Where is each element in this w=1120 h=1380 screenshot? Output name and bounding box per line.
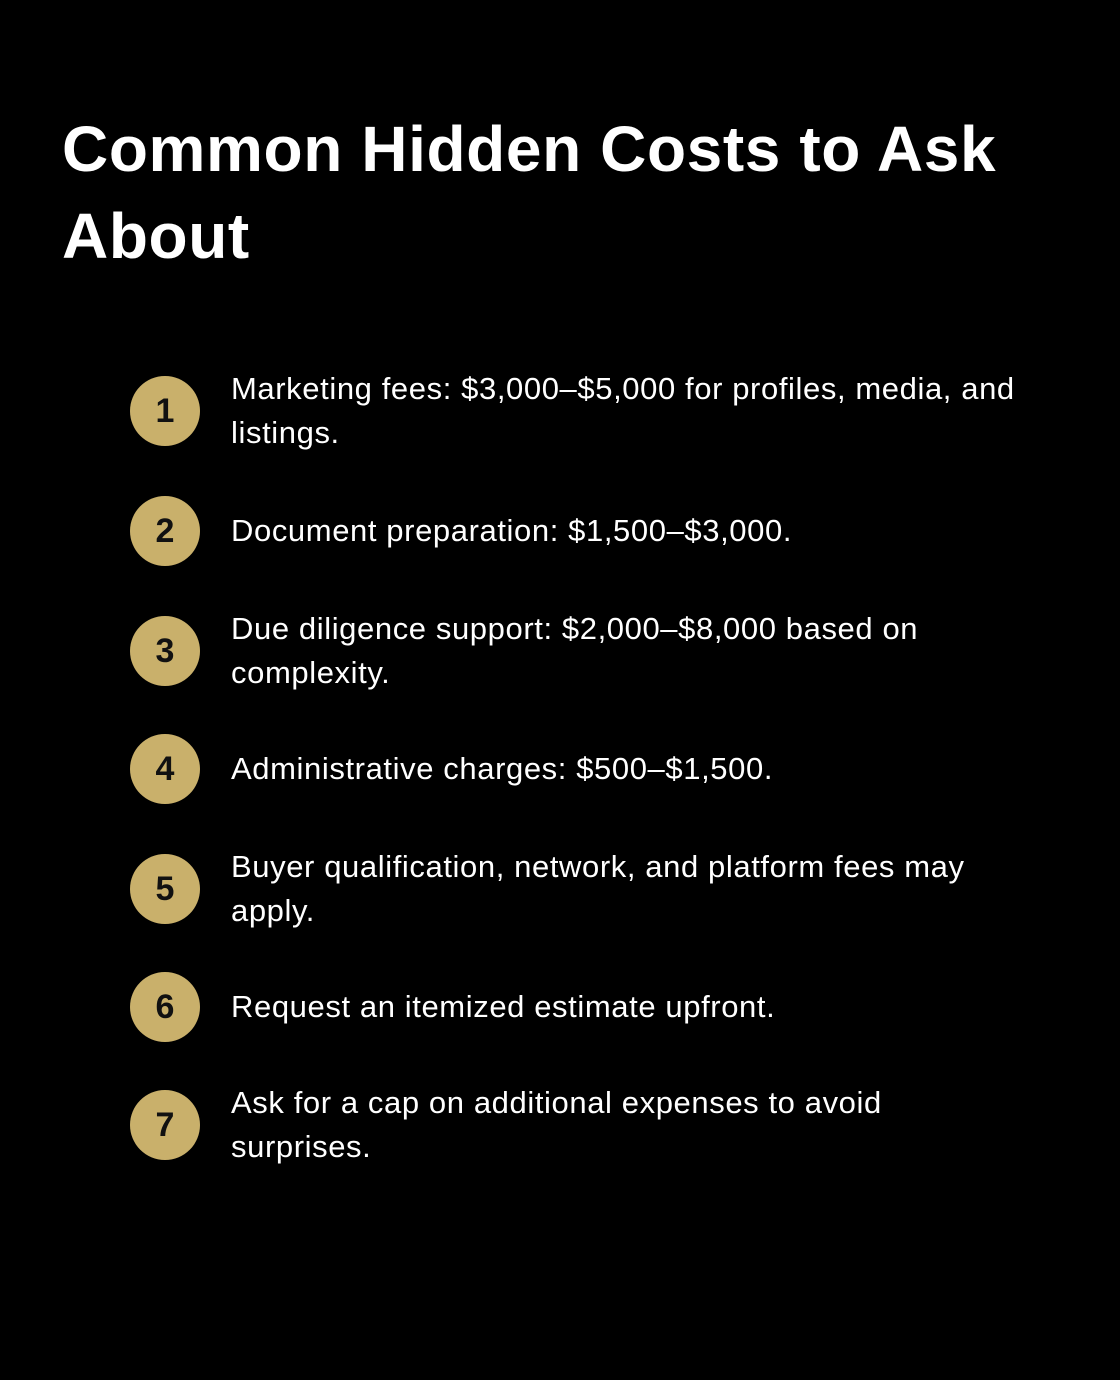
- text 5: [231, 849, 965, 928]
- text 1: listings.: [231, 415, 340, 450]
- text 7: [231, 1085, 882, 1164]
- text 4: Administrative charges: $500–$1,500.: [231, 751, 773, 786]
- item 3: [130, 611, 918, 690]
- number badge 7: 7: [156, 1106, 174, 1144]
- item 2: [130, 496, 792, 566]
- number badge 1: [130, 376, 200, 446]
- number badge 3: 3: [156, 632, 174, 670]
- number badge 5: 5: [156, 870, 174, 908]
- text 5: apply.: [231, 893, 315, 928]
- number badge 2: [130, 496, 200, 566]
- text 3: [231, 611, 918, 690]
- number badge 4: [130, 734, 200, 804]
- number badge 5: [130, 854, 200, 924]
- number badge 6: [130, 972, 200, 1042]
- item 7: [130, 1085, 882, 1164]
- text 5: Buyer qualification, network, and platform fees may: [231, 849, 965, 884]
- text 7: Ask for a cap on additional expenses to avoid: [231, 1085, 882, 1120]
- number badge 6: 6: [156, 988, 174, 1026]
- text 1: [231, 371, 1015, 450]
- text 3: complexity.: [231, 655, 390, 690]
- number badge 1: 1: [156, 392, 174, 430]
- item 4: [130, 734, 773, 804]
- text 7: surprises.: [231, 1129, 371, 1164]
- item 1: [130, 371, 1015, 450]
- number badge 4: 4: [156, 750, 174, 788]
- number badge 3: [130, 616, 200, 686]
- number badge 7: [130, 1090, 200, 1160]
- item 6: [130, 972, 775, 1042]
- text 2: Document preparation: $1,500–$3,000.: [231, 513, 792, 548]
- text 6: Request an itemized estimate upfront.: [231, 989, 775, 1024]
- text 1: Marketing fees: $3,000–$5,000 for profiles, media, and: [231, 371, 1015, 406]
- item 5: [130, 849, 965, 928]
- text 3: Due diligence support: $2,000–$8,000 based on: [231, 611, 918, 646]
- title: Common Hidden Costs to Ask About: [62, 113, 996, 272]
- number badge 2: 2: [156, 512, 174, 550]
